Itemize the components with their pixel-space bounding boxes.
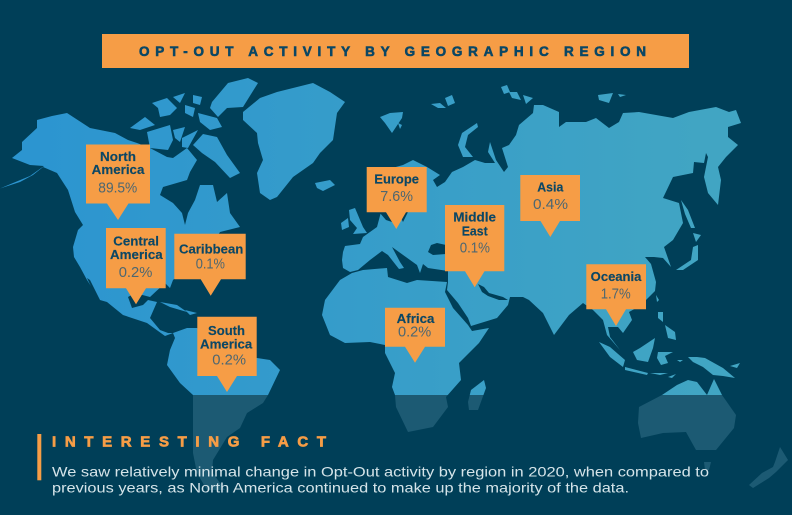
map: Japan and Sakhalin <box>676 200 701 270</box>
map: Arctic Russian islands <box>380 85 626 157</box>
callout: Central America: America <box>110 247 163 262</box>
callout: Central America <box>106 228 166 304</box>
callout: North America: 89.5% <box>98 180 137 197</box>
callout: North America: North <box>100 149 136 164</box>
callout: Caribbean <box>174 234 246 296</box>
callout: Africa <box>385 308 445 363</box>
callout: Oceania: Oceania <box>591 269 642 284</box>
callout: Europe: 7.6% <box>380 188 413 205</box>
accent bar <box>37 434 41 480</box>
map: Madagascar <box>468 380 486 410</box>
callout: Middle East: Middle <box>453 210 496 225</box>
map: Arctic islands <box>130 78 258 178</box>
inland seas <box>87 212 508 300</box>
title banner: OPT-OUT ACTIVITY BY GEOGRAPHIC REGION <box>139 44 646 59</box>
title banner <box>102 34 689 68</box>
world map <box>0 78 788 490</box>
interesting fact panel <box>37 434 713 495</box>
callout: Africa: Africa <box>397 311 435 326</box>
map: New Zealand <box>749 447 788 488</box>
callout: South America: 0.2% <box>212 351 246 368</box>
callout: Oceania: 1.7% <box>601 286 631 303</box>
map: Tasmania <box>704 462 711 470</box>
callout: South America: South <box>208 323 245 338</box>
callout: Central America: 0.2% <box>119 264 152 281</box>
map: Australia <box>638 379 736 450</box>
callout: South America: America <box>200 336 253 351</box>
map: Caribbean islands <box>160 302 197 315</box>
callout: Oceania <box>586 264 646 326</box>
fact body text: We saw relatively minimal change in Opt-Out activity by region in 2020, when compared to <box>52 464 709 480</box>
callout: Caribbean: 0.1% <box>196 255 225 272</box>
callout: Africa: 0.2% <box>398 324 431 341</box>
map: Southeast Asia islands <box>599 295 740 378</box>
map: North America <box>0 113 240 336</box>
callout: Asia: 0.4% <box>533 196 568 213</box>
callout: Asia: Asia <box>537 180 564 195</box>
map: British Isles <box>341 208 367 234</box>
callout: Caribbean: Caribbean <box>179 242 243 257</box>
callout: Central America: Central <box>113 234 159 249</box>
fact heading: INTERESTING FACT <box>52 434 326 451</box>
callout: Middle East: 0.1% <box>460 240 490 257</box>
callout: Europe <box>367 167 427 229</box>
map: Eurasia <box>342 105 741 350</box>
callout: North America: America <box>92 162 145 177</box>
callout: Asia <box>520 175 580 237</box>
map: Iceland <box>315 180 335 191</box>
callout: North America <box>86 144 150 220</box>
callout: South America <box>197 317 257 392</box>
callout: Middle East <box>445 205 504 287</box>
callout: Europe: Europe <box>374 172 419 187</box>
map: Africa <box>322 268 489 432</box>
map: South America <box>167 328 280 490</box>
fact body text: previous years, as North America continued to make up the majority of the data. <box>52 479 629 495</box>
map: Greenland <box>243 83 345 200</box>
callout: Middle East: East <box>462 224 488 239</box>
